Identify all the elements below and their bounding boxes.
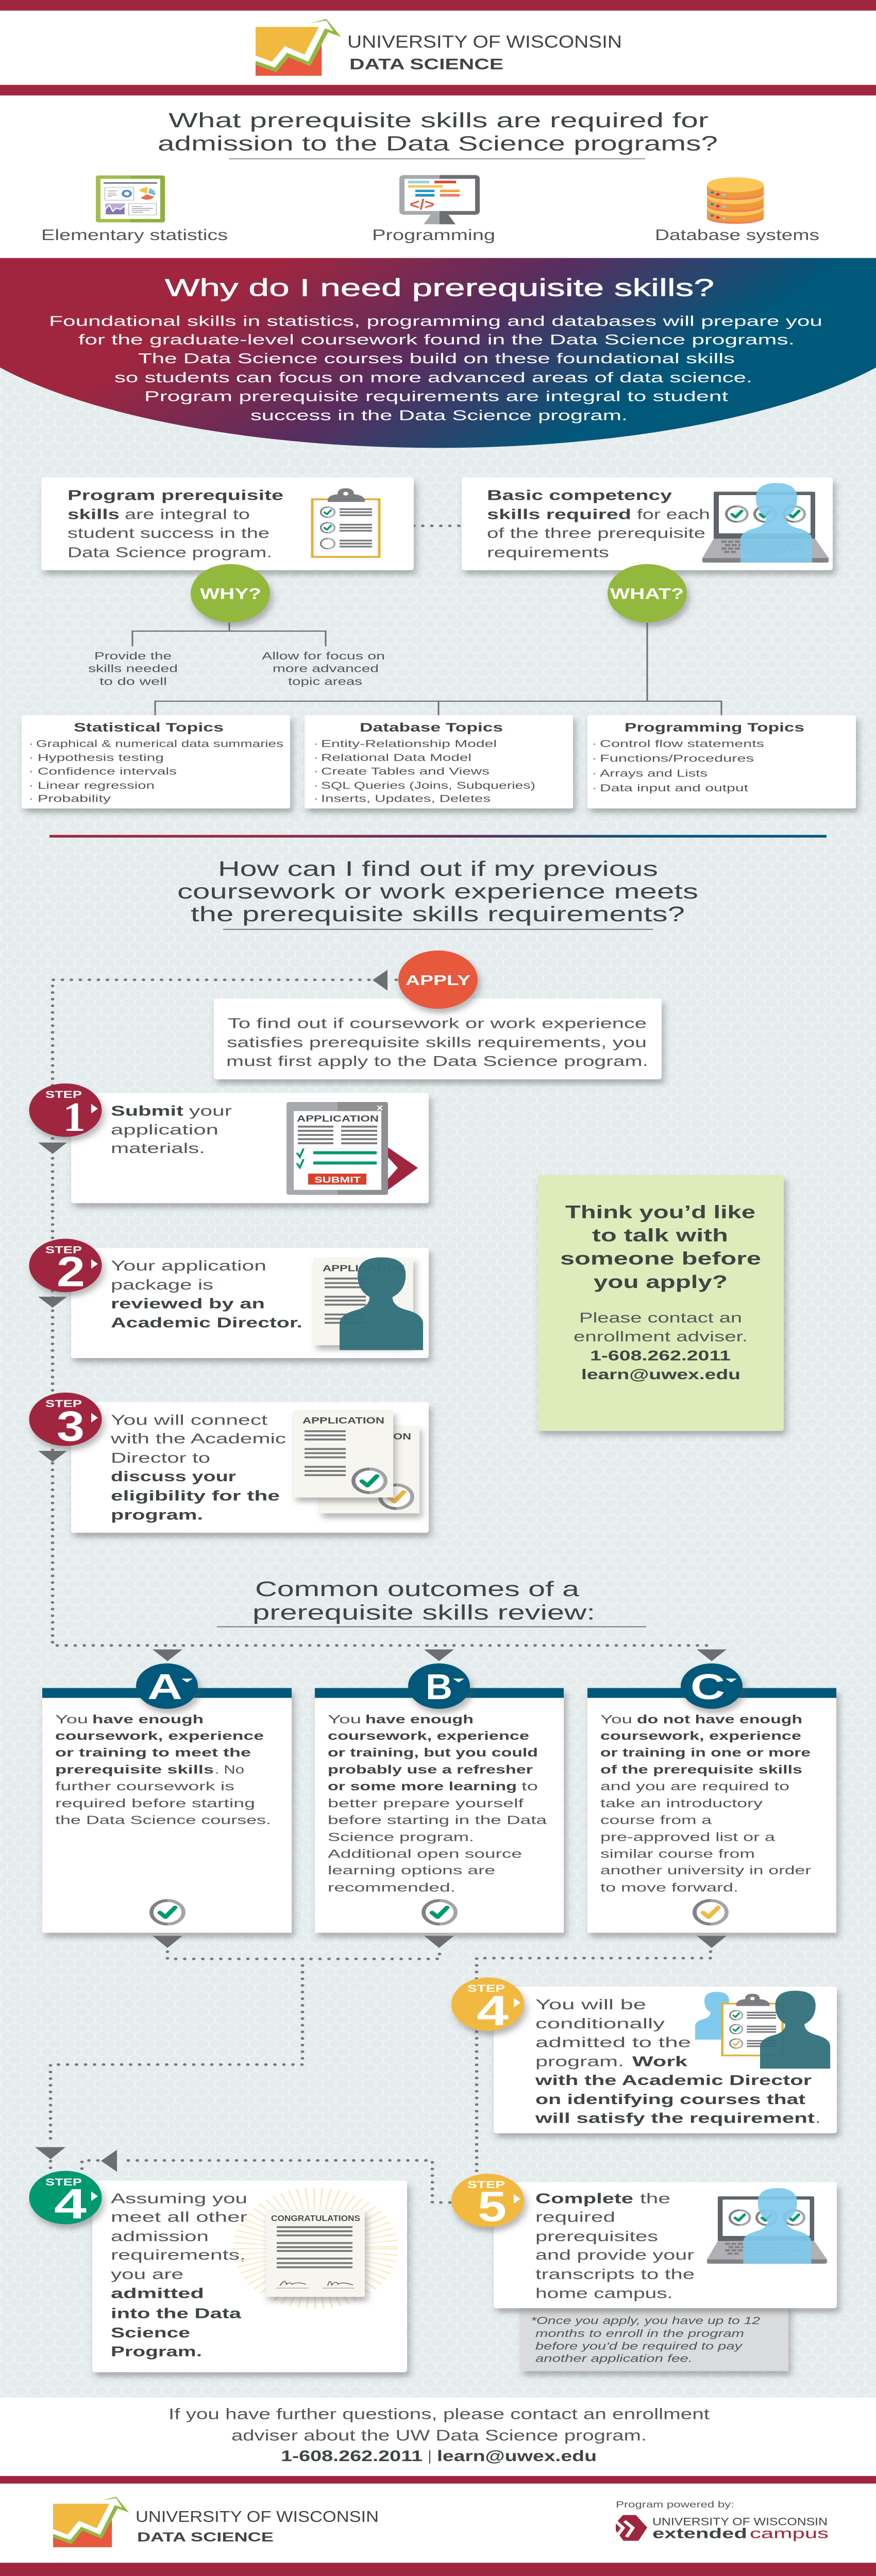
outcome C text: another university in order [600,1863,811,1877]
banner paragraph: success in the Data Science program. [250,408,628,423]
icon: yellow check [695,1901,727,1924]
step text: conditionally [535,2015,665,2031]
step text: you are [111,2266,183,2282]
flow: dotted path from step 5 to admitted step [82,2160,450,2202]
step text: into the Data [111,2306,242,2321]
list: · [29,780,33,791]
why reason: allow for focus [262,651,385,687]
list: · [314,766,318,777]
icon: green check [424,1901,456,1924]
outcome C text: do not have enough [637,1713,802,1726]
arrow: from outcome A [153,1936,182,1948]
closing text: further questions: If you have further questions, please contact an enrollment [169,2406,710,2422]
arrow: to admitted step from step 5 [101,2150,117,2172]
list: Hypothesis testing [38,752,164,764]
panel text: Basic competency [487,487,672,503]
callout heading: to talk with [592,1225,728,1245]
step text: Science [111,2325,190,2341]
outcome B text: Additional open source [328,1847,522,1860]
badge: what: WHAT? [610,586,684,602]
panel text: skills required [487,506,631,522]
logo wordmark: UNIVERSITY OF WISCONSIN [347,32,622,52]
outcome B text [328,1713,547,1894]
step text: Academic Director. [111,1315,302,1331]
list: · [314,738,318,750]
extended campus wordmark [652,2516,829,2541]
why reason: allow for focus: topic areas [288,676,362,687]
icon: reviewer with application: APPLICATION [323,1264,405,1274]
outcome B text: to [521,1780,538,1793]
list: · [314,793,318,805]
extended campus wordmark: campus [750,2526,829,2541]
banner paragraph: The Data Science courses build on these foundational skills [138,351,735,367]
banner paragraph: Foundational skills in statistics, programming and databases will prepare you [49,313,822,329]
arrow: to outcome A [153,1649,182,1661]
badge: step 3: 3 [57,1402,85,1450]
callout contact: 1-608.262.2011 [590,1348,731,1364]
callout contact: enrollment adviser. [574,1329,748,1345]
icon: reviewer with application [314,1257,423,1350]
connector: what tree [155,623,721,715]
badge: step 5 [451,2174,524,2230]
panel: apply explanation: satisfies prerequisite skills requirements, you [227,1035,647,1050]
outcome C text [600,1713,811,1894]
list: Probability [38,793,111,805]
header: lower burgundy bar [0,85,876,95]
icon: application form [287,1102,418,1195]
icon: congratulations certificate [251,2201,380,2297]
callout contact [574,1310,748,1383]
list: SQL Queries (Joins, Subqueries) [321,780,535,791]
step text [111,2191,247,2360]
panel: step 1 [71,1093,429,1203]
closing text: further questions: learn@uwex.edu [437,2448,597,2465]
outcome A text [55,1713,271,1826]
list: · [29,738,33,750]
why reason: allow for focus: more advanced [273,663,379,674]
badge: conditional step 4: STEP [467,1983,505,1994]
step text: . [815,2110,821,2126]
step text: You will be [535,1997,646,2013]
outcome B text: Science program. [328,1831,474,1844]
panel: database topics [305,715,573,808]
list: · [592,738,597,750]
step text: home campus. [535,2285,673,2301]
step text [111,1258,302,1331]
outcome C text: You [600,1713,632,1726]
callout heading: Think you’d like [565,1202,755,1222]
badge: step 2 [29,1239,102,1295]
icon: statistics dashboard [96,175,165,223]
outcome B text: coursework, experience [328,1729,529,1742]
panel text: skills [68,506,120,522]
outcome B text: You [328,1713,361,1726]
outcome B text: have enough [365,1713,474,1726]
outcome A text: the Data Science courses. [55,1813,271,1826]
note: application fee: *Once you apply, you have up to 12 [531,2315,760,2327]
skill: programming [372,175,495,244]
logo mark [256,19,341,76]
title: what prerequisite skills [158,109,718,159]
outcome C text: take an introductory [600,1797,763,1810]
step text: Complete [535,2191,633,2207]
banner heading: Why do I need prerequisite skills? [165,274,714,301]
outcome A text: required before starting [55,1797,255,1810]
panel: programming topics [587,715,856,808]
arrow: to admitted step from A and B [35,2147,65,2159]
icon: adviser and student with checklist [695,1991,830,2069]
list [592,738,764,794]
connector: why tree [132,623,326,646]
list [29,738,283,805]
heading: Programming Topics [625,721,804,735]
note: application fee: before you'd be required to pay [535,2341,743,2352]
outcome A text: have enough [92,1713,204,1726]
skill: elementary statistics [41,175,228,244]
icon: application form: SUBMIT [314,1176,361,1185]
arrow: from outcome B [424,1936,454,1948]
panel text: requirements [487,545,609,561]
panel text: are integral to [125,506,250,522]
badge: what [608,564,687,622]
why reason: provide the skills: Provide the [94,651,172,662]
heading: how can I find out: the prerequisite skills requirements? [191,903,685,926]
step text: Submit [111,1103,183,1119]
logo mark [53,2497,129,2547]
badge: A: A [147,1667,182,1707]
panel: step 5 [494,2182,837,2308]
closing text: further questions: adviser about the UW Data Science program. [231,2427,647,2444]
step text: Director to [111,1450,210,1466]
note: application fee: another application fee. [535,2353,693,2365]
label: Elementary statistics [41,227,228,244]
outcome C text: similar course from [600,1847,755,1860]
arrow: step 1 down [38,1143,67,1154]
panel: admitted step 4 [92,2180,407,2372]
list: Relational Data Model [321,752,471,764]
step text: Work [632,2054,688,2070]
step text: meet all other [111,2209,247,2225]
list: · [592,768,597,779]
outcome A text: further coursework is [55,1780,234,1793]
icon: application form: APPLICATION [297,1114,379,1124]
list: · [29,766,33,777]
outcome C text: or training in one or more [600,1746,811,1759]
step text: You will connect [111,1412,268,1428]
panel text: for each [637,506,710,522]
badge: conditional step 4: 4 [477,1987,509,2034]
heading: Database Topics [360,721,503,735]
outcome A text: or training to meet the [55,1746,251,1759]
panel: statistical topics [22,715,290,808]
callout contact: Please contact an [579,1310,742,1326]
header: University of Wisconsin Data Science logo [256,19,622,76]
badge: admitted step 4: 4 [54,2180,87,2227]
banner paragraph [49,313,822,423]
badge: conditional step 4 [451,1977,524,2034]
skill: database systems [655,177,819,244]
list: Control flow statements [600,738,764,750]
step text: prerequisites [535,2229,658,2245]
outcome A text: prerequisite skills [55,1763,214,1776]
list: Arrays and Lists [600,768,707,779]
list: Create Tables and Views [321,766,490,777]
logo wordmark [136,2507,379,2545]
banner paragraph: Program prerequisite requirements are integral to student [144,388,729,404]
heading: common outcomes [217,1578,646,1627]
why reason: provide the skills: skills needed [88,663,178,674]
list: Graphical & numerical data summaries [36,738,283,750]
panel text: Data Science program. [68,545,272,561]
outcome C text: pre-approved list or a [600,1831,775,1844]
why reason: provide the skills: to do well [99,676,167,687]
outcome B text: or some more learning [328,1780,517,1793]
step text: with the Academic [110,1431,286,1447]
icon: extended campus mark [616,2515,647,2541]
arrow: to outcome B [424,1649,454,1661]
arrow: from apply [373,970,388,991]
icon: two application papers with checks [294,1410,419,1514]
outcome B text: before starting in the Data [328,1813,547,1826]
list: · [314,752,318,764]
extended campus wordmark: UNIVERSITY OF WISCONSIN [652,2516,828,2528]
footer: program powered by [616,2500,829,2541]
step text: will satisfy the requirement [535,2110,815,2126]
callout contact: learn@uwex.edu [581,1367,740,1383]
why reason: allow for focus: Allow for focus on [262,651,385,662]
callout: talk to an adviser [537,1175,784,1431]
panel text [68,487,283,561]
list [314,738,535,805]
icon: person at laptop [707,2188,827,2264]
outcome B text: recommended. [328,1880,456,1894]
outcome B text: learning options are [328,1863,495,1877]
footer: upper burgundy bar [0,2476,876,2484]
list: Inserts, Updates, Deletes [321,793,491,805]
flow: dotted path from outcomes A and B to final step [50,1952,440,2171]
outcome A text: coursework, experience [55,1729,264,1742]
outcome A text: You [55,1713,88,1726]
flow: dotted path from outcome C to conditional step [477,1952,711,2171]
arrow: from outcome C [697,1936,727,1948]
step text: with the Academic Director [535,2073,812,2089]
step text [111,1103,232,1157]
step text: admitted [111,2285,204,2301]
connector: dotted link between top cards [414,524,462,528]
step text: and provide your [535,2247,694,2263]
panel: outcome C [587,1664,836,1933]
step text: discuss your [111,1469,236,1485]
icon: green check [151,1901,183,1924]
panel: step 2 [71,1248,429,1358]
step text: application [111,1122,218,1138]
list: · [314,780,318,791]
badge: step 5: STEP [467,2179,505,2190]
outcome A text: . No [215,1763,244,1776]
heading: how can I find out [177,857,698,930]
step text: the [640,2191,670,2207]
badge: A [136,1664,198,1709]
step text: on identifying courses that [535,2092,805,2108]
step text: requirements, [111,2247,246,2263]
icon: database [707,177,764,224]
outcome C text: and you are required to [600,1780,789,1793]
badge: C [681,1664,743,1709]
why reason: provide the skills [88,651,178,687]
step text: reviewed by an [111,1296,265,1312]
badge: apply: APPLY [406,972,470,988]
outcome C text: coursework, experience [600,1729,801,1742]
panel text: Program prerequisite [68,487,283,503]
panel: basic competency skills [462,477,833,570]
panel: apply explanation: To find out if coursework or work experience [228,1015,647,1031]
outcome B text: probably use a refresher [328,1763,533,1776]
icon: monitor with code [399,175,480,224]
badge: step 1: STEP [45,1089,82,1100]
title: what prerequisite skills: admission to the Data Science programs? [158,132,718,155]
icon: person at laptop [702,483,829,563]
step text: package is [111,1277,213,1293]
badge: B [408,1664,470,1709]
badge: step 2: 2 [57,1248,85,1295]
icon: clipboard [312,488,379,557]
list: Confidence intervals [38,766,177,777]
badge: step 3 [29,1393,102,1450]
heading: common outcomes: prerequisite skills review: [252,1601,595,1624]
step text: your [189,1103,232,1119]
outcome B text: better prepare yourself [328,1797,524,1810]
logo wordmark: DATA SCIENCE [349,56,503,73]
step text: transcripts to the [535,2266,695,2282]
list: Functions/Procedures [600,753,754,765]
badge: admitted step 4: STEP [45,2176,82,2188]
list: · [29,752,33,764]
banner paragraph: so students can focus on more advanced areas of data science. [114,370,752,386]
icon: application form: x [377,1104,383,1112]
badge: admitted step 4 [29,2171,102,2227]
list: Entity-Relationship Model [321,738,497,750]
badge: why: WHY? [200,586,261,602]
hexagon patterned background [0,341,876,2398]
title: what prerequisite skills: What prerequisite skills are required for [169,109,709,132]
step text: Your application [111,1258,266,1274]
badge: step 2: STEP [45,1244,82,1256]
panel: conditional step 4 [494,1987,837,2133]
badge: apply [398,951,478,1009]
badge: step 1: 1 [63,1094,86,1140]
banner: why do I need prerequisite skills [0,258,876,448]
panel: apply explanation [214,998,662,1079]
badge: C: C [690,1667,725,1707]
panel text: student success in the [68,526,269,541]
note: application fee [520,2303,788,2371]
step text: program. [535,2054,624,2070]
callout heading: someone before [560,1248,761,1268]
logo wordmark [347,32,622,73]
heading: how can I find out: How can I find out if my previous [218,857,658,880]
footer: program powered by: Program powered by: [616,2500,734,2510]
badge: step 3: STEP [45,1398,82,1409]
step text: admission [111,2229,209,2245]
panel text [487,487,710,561]
footer: bottom burgundy bar [0,2563,876,2576]
list: Data input and output [600,783,749,794]
step text: eligibility for the [111,1488,280,1504]
step text: required [535,2209,615,2225]
flow: dotted path from apply through steps to outcomes [53,980,714,1646]
list: · [592,783,597,794]
panel: program prerequisite skills [41,477,414,570]
arrow: to outcome C [697,1649,727,1661]
panel: outcome A [42,1664,292,1933]
header: top burgundy bar [0,0,876,11]
step text: Assuming you [111,2191,247,2207]
heading: Statistical Topics [74,721,224,735]
panel: apply explanation: must first apply to the Data Science program. [226,1054,648,1070]
heading: common outcomes: Common outcomes of a [255,1578,579,1601]
outcome C text: course from a [600,1813,712,1826]
label: Programming [372,227,495,244]
list: Linear regression [38,780,155,791]
note: application fee: months to enroll in the program [535,2328,744,2340]
logo wordmark: UNIVERSITY OF WISCONSIN [136,2507,379,2526]
step text: materials. [111,1141,205,1157]
list: · [29,793,33,805]
arrow: step 2 down [38,1297,67,1308]
footer: Data Science logo [53,2497,379,2547]
icon: two application papers with checks: APPLICATION [302,1416,384,1426]
step text [535,2191,695,2301]
icon: congratulations certificate: CONGRATULATIONS [271,2214,360,2223]
callout heading: you apply? [594,1272,728,1292]
label: Database systems [655,227,819,244]
badge: step 5: 5 [478,2182,507,2230]
panel: outcome B [315,1664,564,1933]
icon: monitor with code: </> [410,197,434,213]
step text: program. [111,1507,203,1523]
panel: step 3 [71,1402,429,1533]
outcome C text: to move forward. [600,1880,738,1894]
step text: admitted to the [535,2035,691,2050]
callout heading [560,1202,761,1292]
extended campus wordmark: extended [652,2526,747,2541]
badge: why [191,564,270,622]
step text [110,1412,286,1523]
closing text: further questions [169,2406,710,2465]
badge: B: B [426,1667,452,1707]
badge: step 1 [29,1083,102,1140]
icon: two application papers with checks: ON [393,1432,411,1442]
panel text: of the three prerequisite [487,526,705,541]
step text: Program. [111,2344,202,2360]
logo wordmark: DATA SCIENCE [137,2530,274,2545]
list: · [592,753,597,765]
outcome C text: of the prerequisite skills [600,1763,802,1776]
closing text: further questions: 1-608.262.2011 [281,2448,423,2465]
banner paragraph: for the graduate-level coursework found in the Data Science programs. [78,332,795,348]
step text [535,1997,821,2126]
outcome B text: or training, but you could [328,1746,538,1759]
arrow: step 3 down [38,1451,67,1462]
heading: how can I find out: coursework or work experience meets [177,880,698,903]
